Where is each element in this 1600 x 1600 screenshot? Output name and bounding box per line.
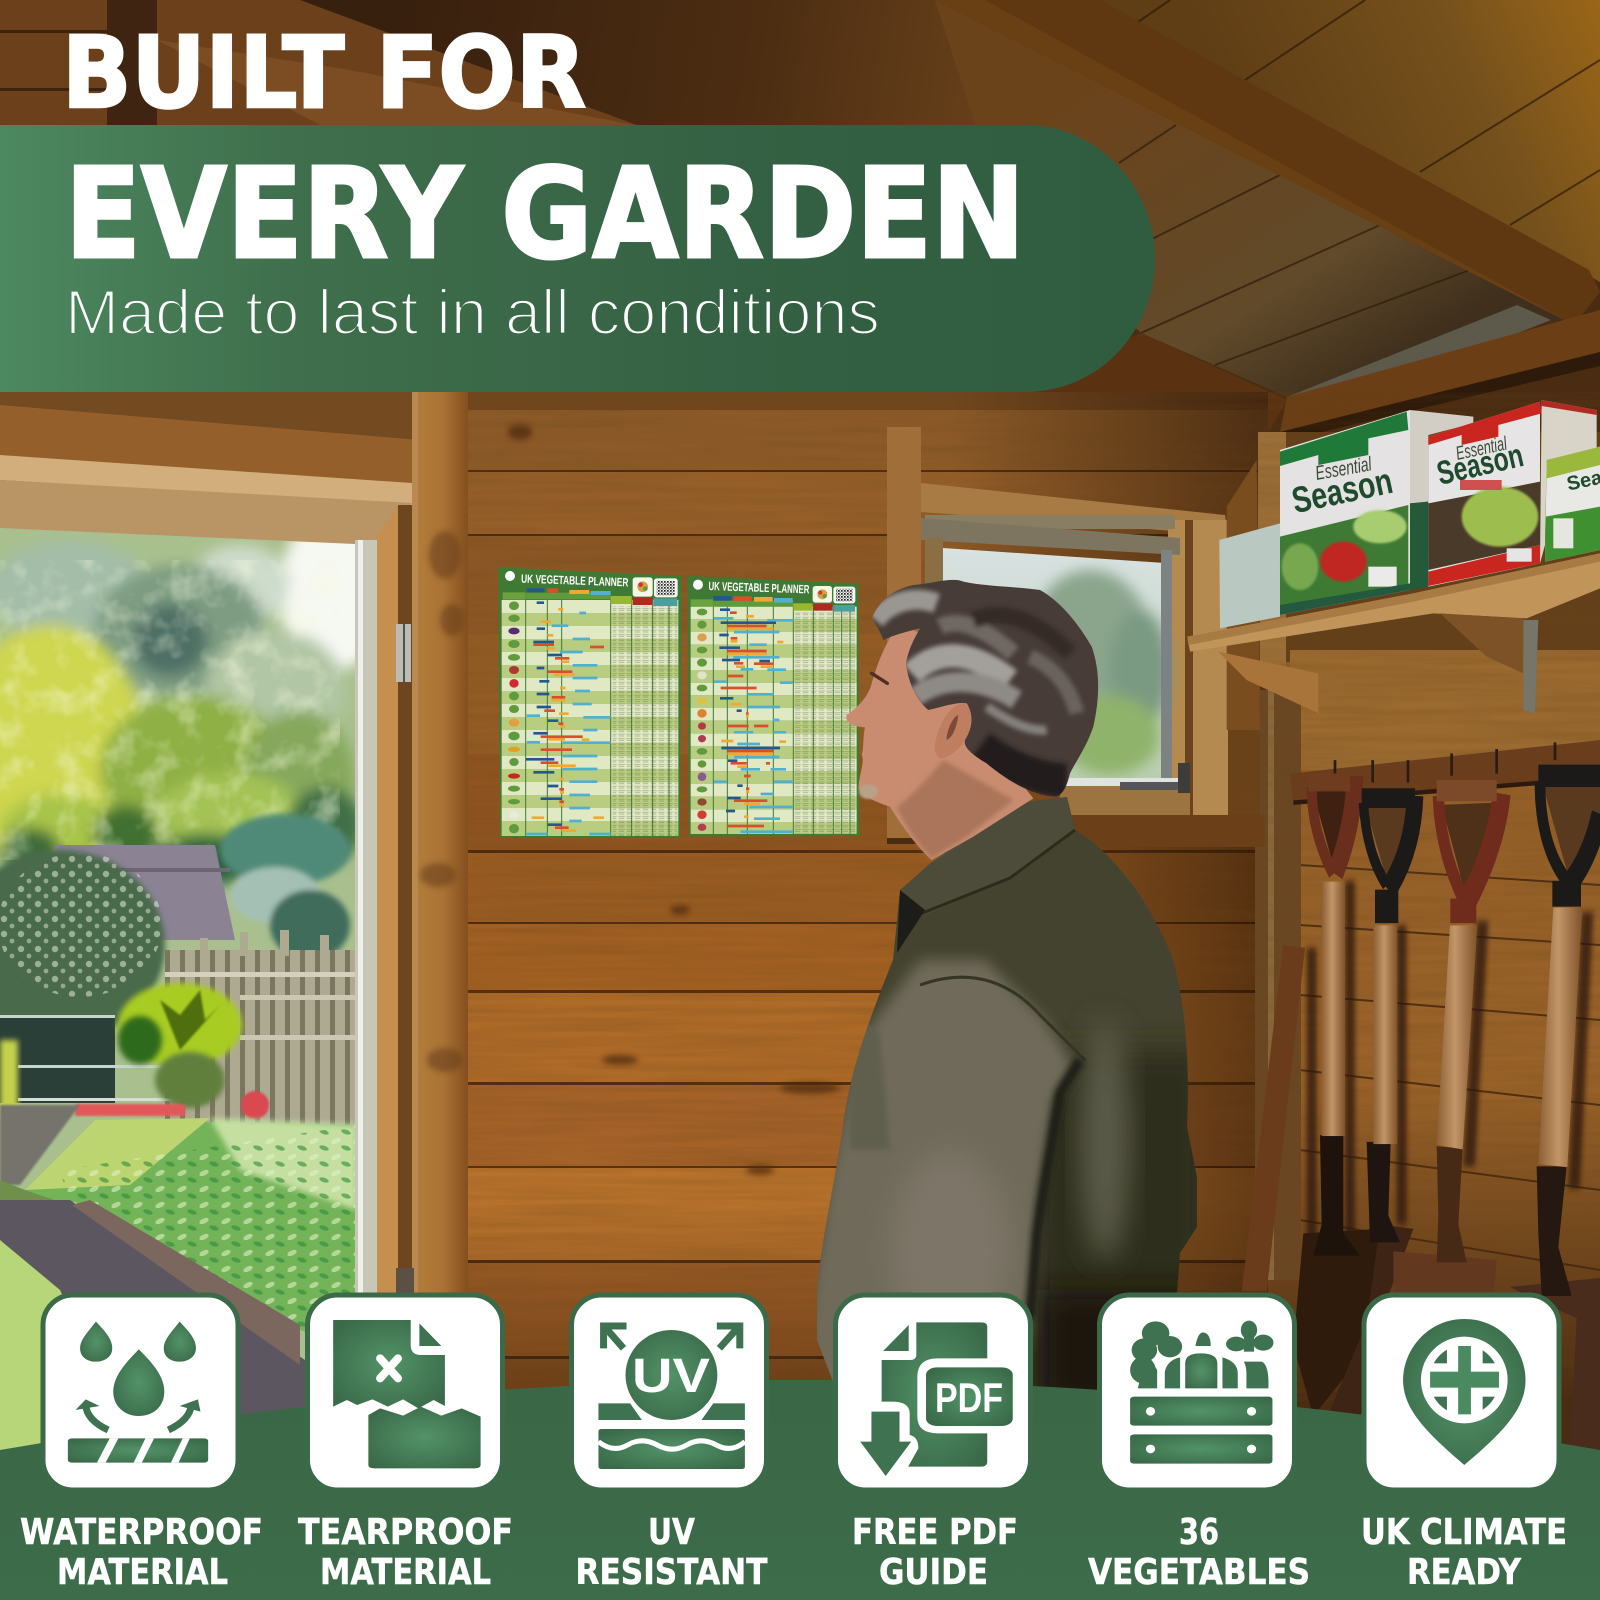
poster title: UK VEGETABLE PLANNER [521,572,629,589]
icon: water drops on fabric [68,1322,208,1463]
label: UK CLIMATE [1361,1512,1567,1553]
pale leaflet package [1219,523,1280,628]
man's shirt [817,797,1197,1390]
wall shadows [1307,881,1593,1291]
icon: location pin with cross [1403,1319,1526,1465]
title: every garden: EVERY GARDEN [65,142,1025,287]
label: MATERIAL [57,1552,228,1593]
hanging rail and hooks [1290,740,1600,805]
card [1100,1295,1294,1490]
garden view through the door [0,510,390,1465]
pdf lettering: PDF [935,1374,1003,1421]
wood grain overlay [0,392,1600,1402]
feature: 36 vegetables [1088,1295,1310,1593]
feature: uk climate ready [1361,1295,1567,1593]
card [308,1295,502,1490]
label: VEGETABLES [1088,1552,1310,1593]
feature: uv resistant [572,1295,768,1593]
icon: pdf download document [860,1322,1013,1476]
back wall planks [468,392,1268,1416]
label: UV [648,1512,695,1553]
icon: vegetable crate [1130,1321,1273,1464]
label: FREE PDF [852,1512,1018,1553]
box: lime season box [1545,447,1600,562]
icon: torn page [333,1320,481,1468]
ceiling [0,0,1600,442]
feature row [20,1295,1567,1593]
uv lettering: UV [632,1350,710,1403]
feature: waterproof material [20,1295,263,1593]
banner [0,125,1155,392]
man looking at the chart [817,580,1197,1390]
spade one [1293,776,1380,1416]
shelf with seed boxes [1187,400,1600,730]
box: red season box: Season [1433,437,1527,493]
label: GUIDE [879,1552,988,1593]
card [572,1295,766,1490]
window on the back wall [887,427,1265,847]
box label text: Essential [1314,453,1374,485]
card [1364,1295,1559,1490]
label: WATERPROOF [20,1512,263,1553]
chart: left poster [498,567,682,837]
shelf board [1187,553,1600,713]
card [836,1295,1030,1490]
fork four [1510,776,1600,1452]
label: MATERIAL [320,1552,491,1593]
icon: uv sun over layers [598,1326,745,1469]
box: red season box [1428,400,1597,587]
feature: tearproof material [298,1295,513,1593]
label: 36 [1179,1512,1219,1553]
label: TEARPROOF [298,1512,513,1553]
label: RESISTANT [576,1552,768,1593]
poster title: UK VEGETABLE PLANNER [708,579,810,597]
leaning handle [1242,945,1305,1291]
spade two [1320,796,1415,1434]
man's ear [935,703,971,758]
subtitle: Made to last in all conditions [65,278,880,348]
box label text: Essential [1454,434,1509,465]
feature: free pdf guide [836,1295,1030,1593]
headline block [0,16,1155,392]
man's hair [872,580,1098,796]
box: green season box: Season [1288,460,1396,521]
card [43,1295,238,1490]
spades hanging on rail [1242,740,1600,1452]
box: green season box [1280,410,1473,615]
bottom green band [0,1380,1600,1600]
door frame and header [0,392,468,1420]
chart bars [526,603,793,834]
wall charts [498,567,859,837]
spade three [1393,791,1502,1345]
chart: right poster [687,576,859,837]
label: READY [1407,1552,1522,1593]
man's neck and face [846,623,1033,860]
title: built for: BUILT FOR [62,16,586,131]
right wall planks [1228,432,1600,1472]
